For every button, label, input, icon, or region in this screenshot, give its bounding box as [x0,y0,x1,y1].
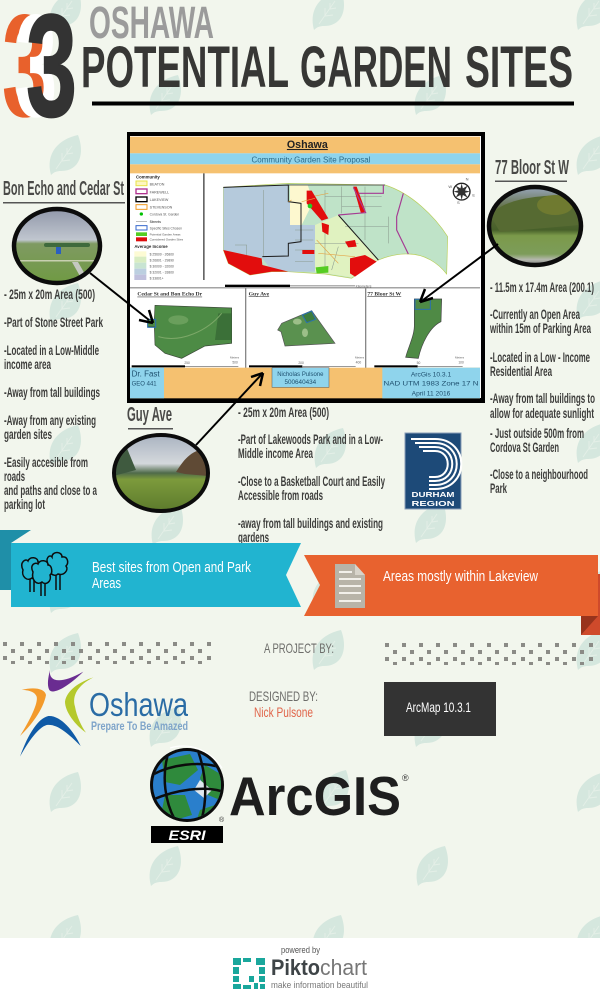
map footer bands: NAD UTM 1983 Zone 17 N [383,381,479,388]
heading: Bon Echo and Cedar St [3,178,124,200]
credit: designed by: DESIGNED BY: [249,688,318,704]
panel: Guy Ave [113,373,385,545]
site map: Cedar St and Bon Echo Dr: Meters [230,355,240,359]
site details: -Close to a Basketball Court and Easily [238,473,385,489]
site map: Cedar St and Bon Echo Dr: 500 [232,360,238,364]
site details: gardens [238,529,269,545]
ESRI badge: ESRI [168,827,207,843]
site details: -Part of Lakewoods Park and in a Low- [238,431,383,447]
site details: -Part of Stone Street Park [4,314,103,330]
banner: areas mostly within Lakeview [304,555,600,635]
site details: income area [4,356,51,372]
site map: 77 Bloor St W: Meters [455,355,465,359]
logo: Esri ArcGIS: ArcGIS [229,765,401,827]
site details [4,286,103,512]
map compass: E [472,193,475,198]
map legend: Potential Garden Areas [150,232,181,236]
site details: -Away from tall buildings [4,384,100,400]
logo: Durham Region: DURHAM [412,490,454,499]
logo: City of Oshawa [20,670,189,757]
site map: Cedar St and Bon Echo Dr: Cedar St and Bon Echo Dr [137,292,203,298]
banner: best sites [0,530,301,607]
arrow to site [90,273,153,323]
site photo [13,208,101,284]
map header bands: Oshawa [287,139,328,151]
site details: and paths and close to a [4,482,97,498]
map footer bands: GEO 441 [132,381,157,387]
ESRI badge [151,826,223,843]
logo: Esri ArcGIS: ® [402,773,409,783]
software box: ArcMap: ArcMap 10.3.1 [406,699,471,715]
title block [2,0,574,147]
site details: -Away from any existing [4,412,96,428]
map footer bands: Dr. Fast [132,370,160,379]
site details: roads [4,468,25,484]
credit: designed by: Nick Pulsone [254,704,313,720]
site map: Guy Ave: Guy Ave [249,291,270,297]
map compass [448,177,475,205]
site map: Cedar St and Bon Echo Dr [132,292,240,367]
heading: Guy Ave [127,404,172,426]
title: potential garden sites: POTENTIAL [81,35,289,100]
site details: Park [490,480,507,496]
site details [489,279,595,496]
map footer bands: Nicholas Pulsone [277,372,324,378]
site map: 77 Bloor St W: 100 [458,360,464,364]
map legend: $ 26801 - 29890 [150,258,174,262]
map scale bar: Kilometers [356,284,372,288]
logo: Esri ArcGIS: ® [219,816,225,824]
site map: 77 Bloor St W [367,291,465,367]
map footer bands: ArcGis 10.3.1 [411,371,451,378]
footer: Piktochart branding: powered by [281,945,320,955]
site map: 77 Bloor St W: 50 [417,361,421,365]
map legend: Streets [150,220,161,224]
map legend: BEATON [150,182,165,186]
icon: trees [22,552,68,596]
title: potential garden sites [81,35,573,100]
credit: designed by [249,688,318,720]
map legend: $ 33801+ [150,276,164,280]
panel: community garden site proposal map [127,132,485,403]
banner: best sites: Areas [92,575,121,592]
logo: Durham Region [405,433,461,509]
site details: Residential Area [490,363,552,379]
site details: -away from tall buildings and existing [238,515,383,531]
site details: -Easily accesible from [4,454,88,470]
heading: a project by: A PROJECT BY: [264,640,334,656]
site photo [113,434,209,512]
arrow to site [420,244,498,302]
panel: Bon Echo and Cedar St [3,178,153,512]
main city map [223,183,448,278]
site map: Guy Ave: 200 [298,361,304,365]
site map: Guy Ave: 400 [356,360,361,364]
banner: best sites: Best sites from Open and Park [92,559,251,576]
site map: Cedar St and Bon Echo Dr: 250 [184,361,190,365]
map legend: Considered Garden Sites [150,238,184,242]
title: potential garden sites: GARDEN [300,35,452,100]
map legend: STEVENSON [150,206,173,210]
map legend: FAREWELL [150,190,169,194]
icon: globe [150,746,224,825]
map footer bands [130,368,480,398]
footer: Piktochart branding: Pikto [271,955,320,980]
map legend: Average Income [134,244,168,249]
map compass: N [466,177,469,182]
site details [238,404,385,545]
site details: -Located in a Low-Middle [4,342,99,358]
map footer bands: 500640434 [284,379,317,386]
site details: garden sites [4,426,52,442]
software box: ArcMap [384,682,496,736]
site details: - 25m x 20m Area (500) [238,404,329,420]
logo: City of Oshawa: Prepare To Be Amazed [91,719,188,733]
site photo [488,186,582,266]
map compass: W [448,184,452,189]
map legend: $ 25600 - 26800 [150,252,174,256]
site details: Accessible from roads [238,487,323,503]
site map: Guy Ave: Meters [355,355,365,359]
map legend: LAKEVIEW [150,198,169,202]
map legend [134,173,205,280]
banner: areas mostly within Lakeview: Areas mostly within Lakeview [383,568,538,585]
logo: Durham Region: REGION [412,499,454,508]
panel: 77 Bloor St W [420,157,595,496]
footer: Piktochart branding: make information beautiful [271,980,368,991]
logo: City of Oshawa: Oshawa [89,686,189,723]
map legend: $ 30000 - 32000 [150,264,174,268]
logo: Esri ArcGIS [150,746,409,843]
map header bands: Community Garden Site Proposal [252,156,371,165]
site map: Guy Ave [249,291,365,367]
footer: Piktochart branding [0,938,600,998]
map legend: Specific Sites Chosen [150,226,182,230]
footer: Piktochart branding: chart [320,955,367,980]
site details: - 25m x 20m Area (500) [4,286,95,302]
icon: Piktochart mark [233,958,265,989]
icon: document [335,564,365,608]
map legend: $ 32001 - 33800 [150,270,174,274]
map compass: S [457,200,460,205]
site details: Middle income Area [238,445,313,461]
map legend: Community [136,175,160,180]
site map: 77 Bloor St W: 77 Bloor St W [367,291,402,297]
map legend: Cordova St. Garden [150,213,179,217]
site details: parking lot [4,496,45,512]
arrow to site [196,373,263,445]
map header bands [130,137,480,173]
map footer bands: April 11 2016 [412,390,451,397]
